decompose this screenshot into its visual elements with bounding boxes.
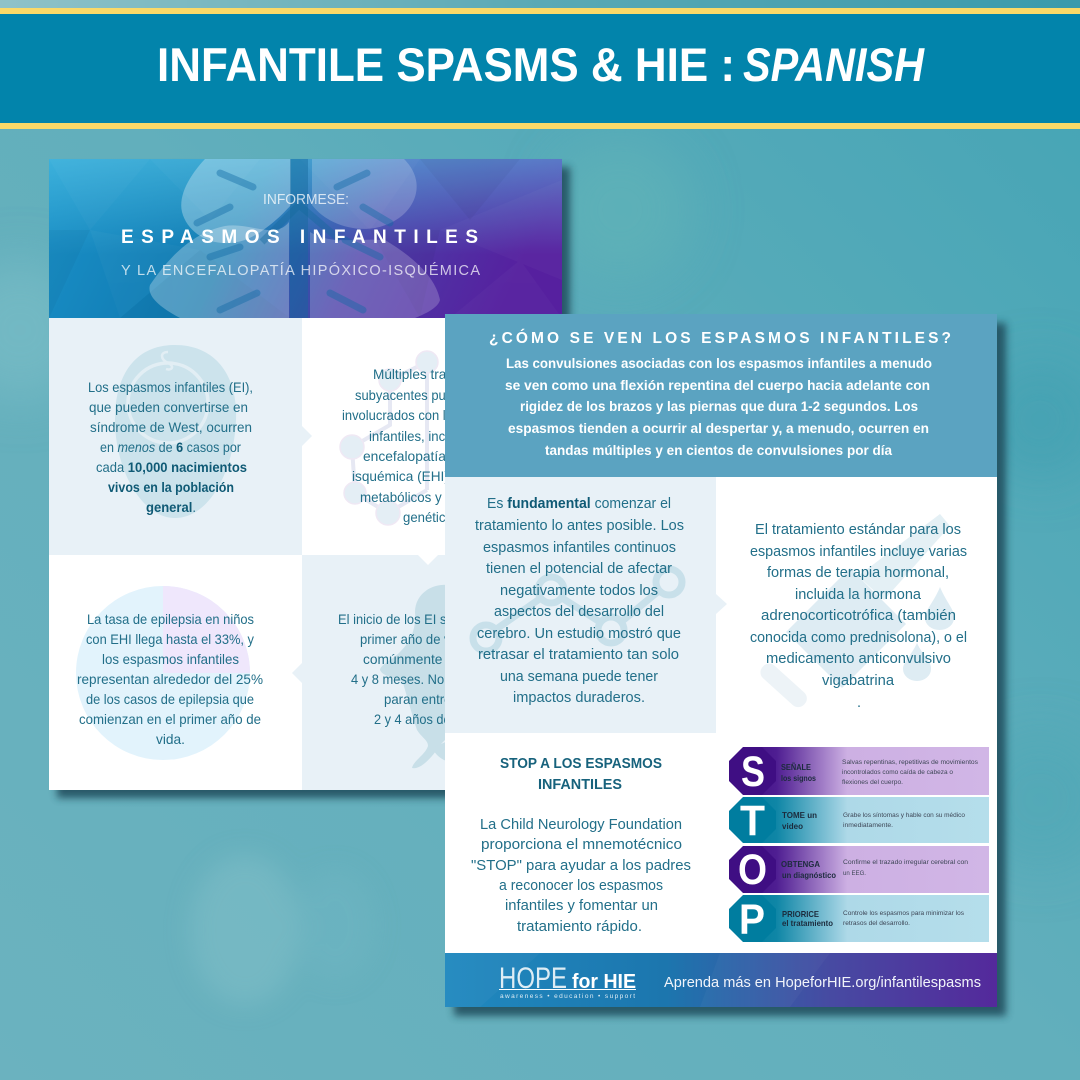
text: standard treatment: vigabatrina (822, 673, 895, 689)
text: standard treatment: espasmos infantiles incluye varias (750, 544, 967, 560)
text: prevalence: Los espasmos infantiles (EI), (88, 379, 253, 395)
panel: right sheet (445, 314, 997, 1007)
row T (729, 797, 989, 845)
text: prevalence: que pueden convertirse en (89, 399, 248, 415)
row S: SEÑALE (781, 762, 811, 772)
banner eyebrow: INFORMESE: (263, 191, 349, 208)
text: early treatment: retrasar el tratamiento tan solo (478, 647, 679, 663)
text: prevalence: general. (146, 499, 196, 515)
text: causes: Múltiples trastornos (373, 366, 491, 382)
text: prevalence: síndrome de West, ocurren (90, 419, 252, 435)
panel: cell prevalence (49, 318, 312, 555)
row O: un diagnóstico (782, 870, 836, 880)
text: epilepsy: La tasa de epilepsia en niños (87, 611, 254, 627)
text: causes: isquémica (EHI), trastornos (352, 468, 517, 484)
text: onset: 4 y 8 meses. Normalmente (351, 671, 505, 687)
card shadow: right sheet (454, 323, 1006, 1016)
panel: what spasms look like (445, 314, 997, 477)
panel: stop mnemonic (729, 747, 989, 944)
row S: Salvas repentinas, repetitivas de movimientos (842, 759, 978, 766)
text: causes: infantiles, incluida la (369, 428, 487, 444)
description: Las convulsiones asociadas con los espasmos infantiles a menudo (506, 355, 932, 371)
title: INFANTILE SPASMS & HIE : (157, 38, 735, 91)
panel: standard treatment (750, 514, 967, 711)
text: standard treatment: conocida como prednisolona), o el (750, 630, 967, 646)
pie chart (76, 586, 250, 760)
stop paragraph (471, 817, 691, 935)
text: early treatment: negativamente todos los (500, 583, 658, 599)
text: onset: comúnmente entre los (363, 651, 499, 667)
logo: HOPE (499, 962, 567, 995)
row O: OBTENGA (781, 859, 820, 869)
row P: PRIORICE (782, 909, 819, 919)
panel: stop text (471, 756, 691, 935)
text: standard treatment: medicamento anticonvulsivo (766, 651, 951, 667)
text: standard treatment: El tratamiento estándar para los (755, 522, 961, 538)
text: causes: metabólicos y defectos (360, 489, 496, 505)
footer band (445, 953, 997, 1007)
description: se ven como una flexión repentina del cuerpo hacia adelante con (505, 377, 930, 393)
panel: early treatment (445, 477, 727, 733)
logo: awareness • education • support (500, 993, 635, 1000)
text: prevalence: vivos en la población (108, 479, 234, 495)
row P: Controle los espasmos para minimizar los (843, 910, 964, 917)
stop paragraph: a reconocer los espasmos (499, 878, 663, 894)
text: early treatment: impactos duraderos. (513, 690, 645, 706)
text: epilepsy (77, 611, 263, 747)
text: early treatment: tratamiento lo antes posible. Los (475, 518, 684, 534)
panel: cell epilepsy (76, 586, 263, 760)
icon: lungs (149, 159, 440, 318)
row P: el tratamiento (782, 918, 833, 928)
panel: cell onset (292, 555, 562, 790)
row O: un EEG. (843, 870, 866, 877)
text: epilepsy: los espasmos infantiles (102, 651, 239, 667)
text: early treatment: Es fundamental comenzar el (487, 496, 671, 512)
text: epilepsy: con EHI llega hasta el 33%, y (86, 631, 254, 647)
footer link: Aprenda más en HopeforHIE.org/infantilespasms (664, 974, 981, 991)
text: onset: paran entre los (384, 691, 472, 707)
text: epilepsy: representan alrededor del 25% (77, 671, 263, 687)
text: early treatment: una semana puede tener (500, 669, 658, 685)
description: rigidez de los brazos y las piernas que dura 1-2 segundos. Los (520, 398, 918, 414)
banner title: ESPASMOS INFANTILES (121, 227, 478, 248)
row P (729, 895, 989, 944)
header band (0, 8, 1080, 129)
logo: for HIE (572, 971, 636, 993)
text: onset: 2 y 4 años de edad. (374, 711, 486, 727)
row O: Confirme el trazado irregular cerebral con (843, 859, 969, 866)
stop paragraph: "STOP" para ayudar a los padres (471, 858, 691, 874)
row T: T (740, 797, 765, 845)
row O: O (738, 846, 767, 894)
text: prevalence: en menos de 6 casos por (100, 439, 241, 455)
row T: video (782, 821, 803, 831)
stop heading (500, 756, 662, 793)
icon: molecule (340, 351, 438, 525)
text: standard treatment: formas de terapia hormonal, (767, 565, 949, 581)
text: standard treatment: adrenocorticotrófica (también (761, 608, 956, 624)
text: onset: El inicio de los EI suele ser en el (338, 611, 524, 627)
stop paragraph: proporciona el mnemotécnico (481, 837, 682, 853)
row T: TOME un (782, 810, 817, 820)
text: onset: primer año de vida, y más (360, 631, 510, 647)
text: causes: encefalopatía hipóxico- (363, 448, 505, 464)
text: early treatment: cerebro. Un estudio mostró que (477, 626, 681, 642)
row S: los signos (781, 773, 816, 783)
logo (499, 962, 636, 1000)
icon: baby silhouette (380, 585, 450, 768)
row P: P (739, 896, 765, 944)
text: causes: involucrados con los espasmos (342, 407, 522, 423)
row S: flexiones del cuerpo. (842, 779, 903, 786)
banner subtitle: Y LA ENCEFALOPATÍA HIPÓXICO-ISQUÉMICA (121, 262, 480, 279)
text: early treatment: tienen el potencial de afectar (486, 561, 672, 577)
stop heading: STOP A LOS ESPASMOS (500, 756, 662, 772)
row S: S (741, 748, 765, 796)
description: tandas múltiples y en cientos de convulsiones por día (545, 442, 892, 458)
row T: inmediatamente. (843, 822, 893, 829)
text: causes (342, 366, 522, 525)
stop heading: INFANTILES (538, 777, 622, 793)
text: prevalence: cada 10,000 nacimientos (96, 459, 247, 475)
description (505, 355, 932, 458)
text: prevalence (88, 379, 253, 515)
icon: line graph (473, 569, 682, 651)
row S: incontrolados como caída de cabeza o (842, 769, 953, 776)
text: early treatment: espasmos infantiles continuos (483, 540, 676, 556)
panel: left sheet (49, 159, 562, 790)
row T: Grabe los síntomas y hable con su médico (843, 812, 965, 819)
icon: syringe (757, 514, 954, 710)
row P: retrasos del desarrollo. (843, 920, 910, 927)
text: standard treatment: . (857, 695, 861, 711)
text: early treatment: aspectos del desarrollo del (494, 604, 664, 620)
title: SPANISH (743, 38, 925, 91)
stop paragraph: infantiles y fomentar un (505, 898, 658, 914)
text: early treatment (475, 496, 684, 706)
text: causes: subyacentes pueden estar (355, 387, 507, 403)
text: standard treatment (750, 522, 967, 711)
row S (729, 747, 989, 796)
stop paragraph: tratamiento rápido. (517, 919, 642, 935)
banner (49, 159, 562, 318)
card shadow: left sheet (57, 167, 570, 798)
text: epilepsy: vida. (156, 731, 185, 747)
icon: baby head (115, 345, 236, 518)
description: espasmos tienden a ocurrir al despertar y, a menudo, ocurren en (508, 420, 929, 436)
text: epilepsy: de los casos de epilepsia que (86, 691, 254, 707)
text: onset (338, 611, 524, 727)
row O (729, 846, 989, 894)
text: causes: genéticos. (403, 509, 463, 525)
text: epilepsy: comienzan en el primer año de (79, 711, 261, 727)
text: standard treatment: incluida la hormona (795, 587, 922, 603)
stop paragraph: La Child Neurology Foundation (480, 817, 682, 833)
panel: cell causes (340, 351, 522, 525)
section heading: ¿CÓMO SE VEN LOS ESPASMOS INFANTILES? (489, 329, 951, 347)
